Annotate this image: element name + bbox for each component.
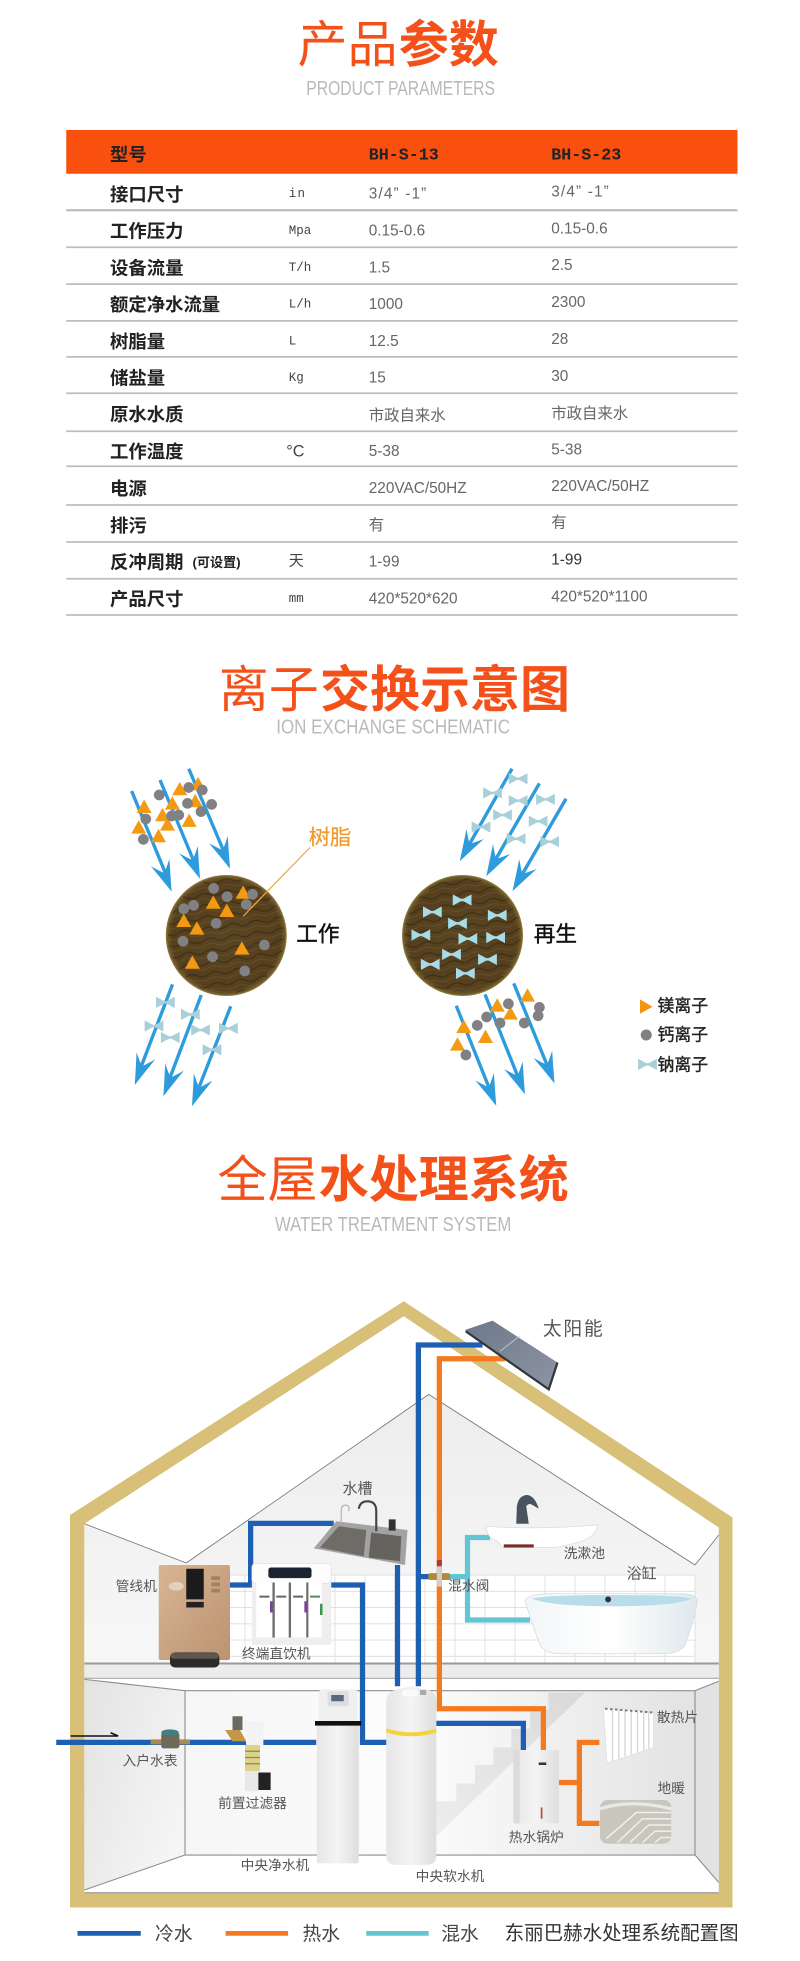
labels: appliances: 混水阀 [448, 1579, 489, 1594]
table: product parameters: 储盐量 [110, 368, 165, 389]
labels: appliances: 终端直饮机 [242, 1647, 311, 1662]
pipes: hot water [439, 1359, 599, 1823]
labels: appliances: 水槽 [342, 1480, 373, 1497]
diagram: regeneration state, outgoing waste [450, 983, 564, 1109]
labels: appliances: 洗漱池 [564, 1546, 605, 1561]
pipes: cold water [56, 1345, 523, 1750]
heading: product parameters: 产品 [298, 17, 398, 73]
table: product parameters: 0.15-0.6 [551, 220, 608, 237]
diagram: regeneration state, incoming brine [451, 769, 566, 896]
table: product parameters: 420*520*620 [369, 590, 458, 607]
table: product parameters: 工作温度 [110, 441, 183, 462]
legend: ions: 钠离子 [657, 1055, 708, 1074]
heading: water treatment system: WATER TREATMENT SYSTEM [275, 1214, 511, 1236]
table: product parameters: 3/4” -1” [369, 186, 426, 203]
legend: ions: 镁离子 [657, 996, 708, 1015]
table: product parameters: °C [286, 443, 305, 461]
table: product parameters: 30 [551, 368, 568, 385]
labels: appliances: 中央净水机 [241, 1858, 310, 1873]
table: product parameters: 天 [289, 554, 304, 571]
radiator [603, 1708, 653, 1763]
labels: appliances [116, 1318, 698, 1884]
stairs [436, 1692, 585, 1836]
label: working: 工作 [296, 921, 339, 946]
prefilter [225, 1716, 271, 1791]
table: product parameters: 1.5 [369, 259, 390, 276]
table: product parameters: 接口尺寸 [110, 184, 183, 205]
labels: appliances: 浴缸 [627, 1564, 657, 1582]
heading: product parameters: 参数 [399, 17, 499, 73]
table: product parameters: 工作压力 [110, 221, 183, 242]
resin bead: regeneration [402, 875, 523, 996]
table: product parameters: L/h [289, 297, 311, 311]
labels: appliances: 入户水表 [122, 1752, 178, 1768]
labels: appliances: 太阳能 [543, 1318, 605, 1339]
table: product parameters: 设备流量 [110, 257, 183, 278]
table: product parameters: 排污 [110, 515, 147, 536]
floor heating [600, 1800, 671, 1844]
table: product parameters: 5-38 [369, 443, 400, 460]
central water purifier [315, 1689, 361, 1863]
diagram: working state, incoming hard water [131, 769, 239, 895]
heading: ion exchange schematic: 交换示意图 [320, 662, 570, 718]
boiler [513, 1750, 559, 1823]
table: product parameters [66, 130, 738, 615]
table: product parameters: mm [289, 592, 304, 606]
heading: water treatment system [218, 1152, 569, 1236]
legend: water types: 混水 [441, 1923, 479, 1944]
heading: water treatment system: 全屋 [218, 1152, 318, 1208]
legend: ions [638, 996, 708, 1074]
RO water filter [252, 1563, 331, 1645]
table: product parameters: 1000 [369, 296, 403, 313]
bathtub [525, 1594, 698, 1654]
table: product parameters: 额定净水流量 [110, 294, 220, 315]
heading: ion exchange schematic: ION EXCHANGE SCHEMATIC [276, 716, 510, 738]
table: product parameters: 3/4” -1” [551, 183, 609, 200]
legend: water types: 热水 [303, 1923, 340, 1944]
labels: appliances: 热水锅炉 [509, 1830, 564, 1845]
table: product parameters: Mpa [289, 224, 312, 238]
table: product parameters: 12.5 [369, 333, 399, 350]
table: product parameters: 0.15-0.6 [369, 222, 425, 239]
table: product parameters: 420*520*1100 [551, 588, 647, 605]
table: product parameters: 220VAC/50HZ [551, 478, 649, 495]
house: interior rooms [84, 1316, 719, 1894]
table: product parameters: 原水水质 [110, 404, 183, 425]
table: product parameters: 电源 [110, 478, 147, 499]
table: product parameters: T/h [289, 261, 311, 275]
wash basin [486, 1495, 598, 1548]
table: product parameters: 树脂量 [110, 331, 165, 352]
table: product parameters: 2300 [551, 294, 585, 311]
table: product parameters: 2.5 [551, 257, 573, 274]
labels: appliances: 管线机 [116, 1579, 157, 1594]
solar panel [465, 1321, 558, 1389]
legend: ions: 钙离子 [657, 1025, 708, 1044]
labels: appliances: 前置过滤器 [218, 1795, 287, 1811]
table: product parameters: 220VAC/50HZ [369, 480, 467, 497]
central softener [386, 1686, 436, 1865]
mixing valve [428, 1560, 450, 1587]
table: product parameters: 反冲周期 [110, 551, 183, 572]
table: product parameters: 15 [369, 370, 386, 387]
table: product parameters: 产品尺寸 [110, 588, 183, 609]
table: product parameters: 市政自来水 [369, 406, 446, 424]
heading: ion exchange schematic [219, 662, 570, 738]
table: product parameters: in [289, 187, 306, 201]
labels: appliances: 地暖 [657, 1781, 685, 1796]
table: product parameters: 市政自来水 [551, 404, 628, 422]
table: product parameters: BH-S-13 [369, 145, 439, 164]
table: product parameters: 有 [551, 514, 567, 532]
label: regeneration: 再生 [534, 921, 577, 946]
labels: appliances: 散热片 [657, 1710, 698, 1725]
heading: ion exchange schematic: 离子 [219, 662, 319, 718]
legend: water types [78, 1922, 739, 1944]
resin bead: working [166, 875, 287, 996]
legend: water types: 东丽巴赫水处理系统配置图 [505, 1922, 739, 1944]
water meter [151, 1729, 190, 1748]
table: product parameters: 28 [551, 331, 568, 348]
table: product parameters: Kg [289, 371, 304, 385]
table: product parameters: BH-S-23 [551, 145, 621, 164]
heading: product parameters [298, 17, 499, 100]
inlet arrow [71, 1733, 118, 1736]
legend: water types: 冷水 [155, 1923, 193, 1944]
wall water dispenser [159, 1565, 230, 1668]
labels: appliances: 中央软水机 [416, 1869, 485, 1884]
kitchen sink [314, 1501, 408, 1565]
diagram: working state, outgoing soft water [125, 984, 238, 1110]
pipes: mixed water [450, 1538, 530, 1620]
callout: resin: 树脂 [309, 826, 351, 850]
table: product parameters: 1-99 [369, 554, 400, 571]
house: frame [70, 1301, 733, 1908]
callout: resin [243, 826, 351, 916]
table: product parameters: 5-38 [551, 442, 582, 459]
table: product parameters: L [289, 334, 296, 348]
heading: product parameters: PRODUCT PARAMETERS [306, 78, 495, 100]
table: product parameters: 1-99 [551, 551, 582, 568]
table: product parameters: (可设置) [193, 555, 241, 570]
heading: water treatment system: 水处理系统 [319, 1152, 569, 1208]
table: product parameters: 型号 [110, 144, 147, 165]
table: product parameters: 有 [369, 516, 384, 534]
